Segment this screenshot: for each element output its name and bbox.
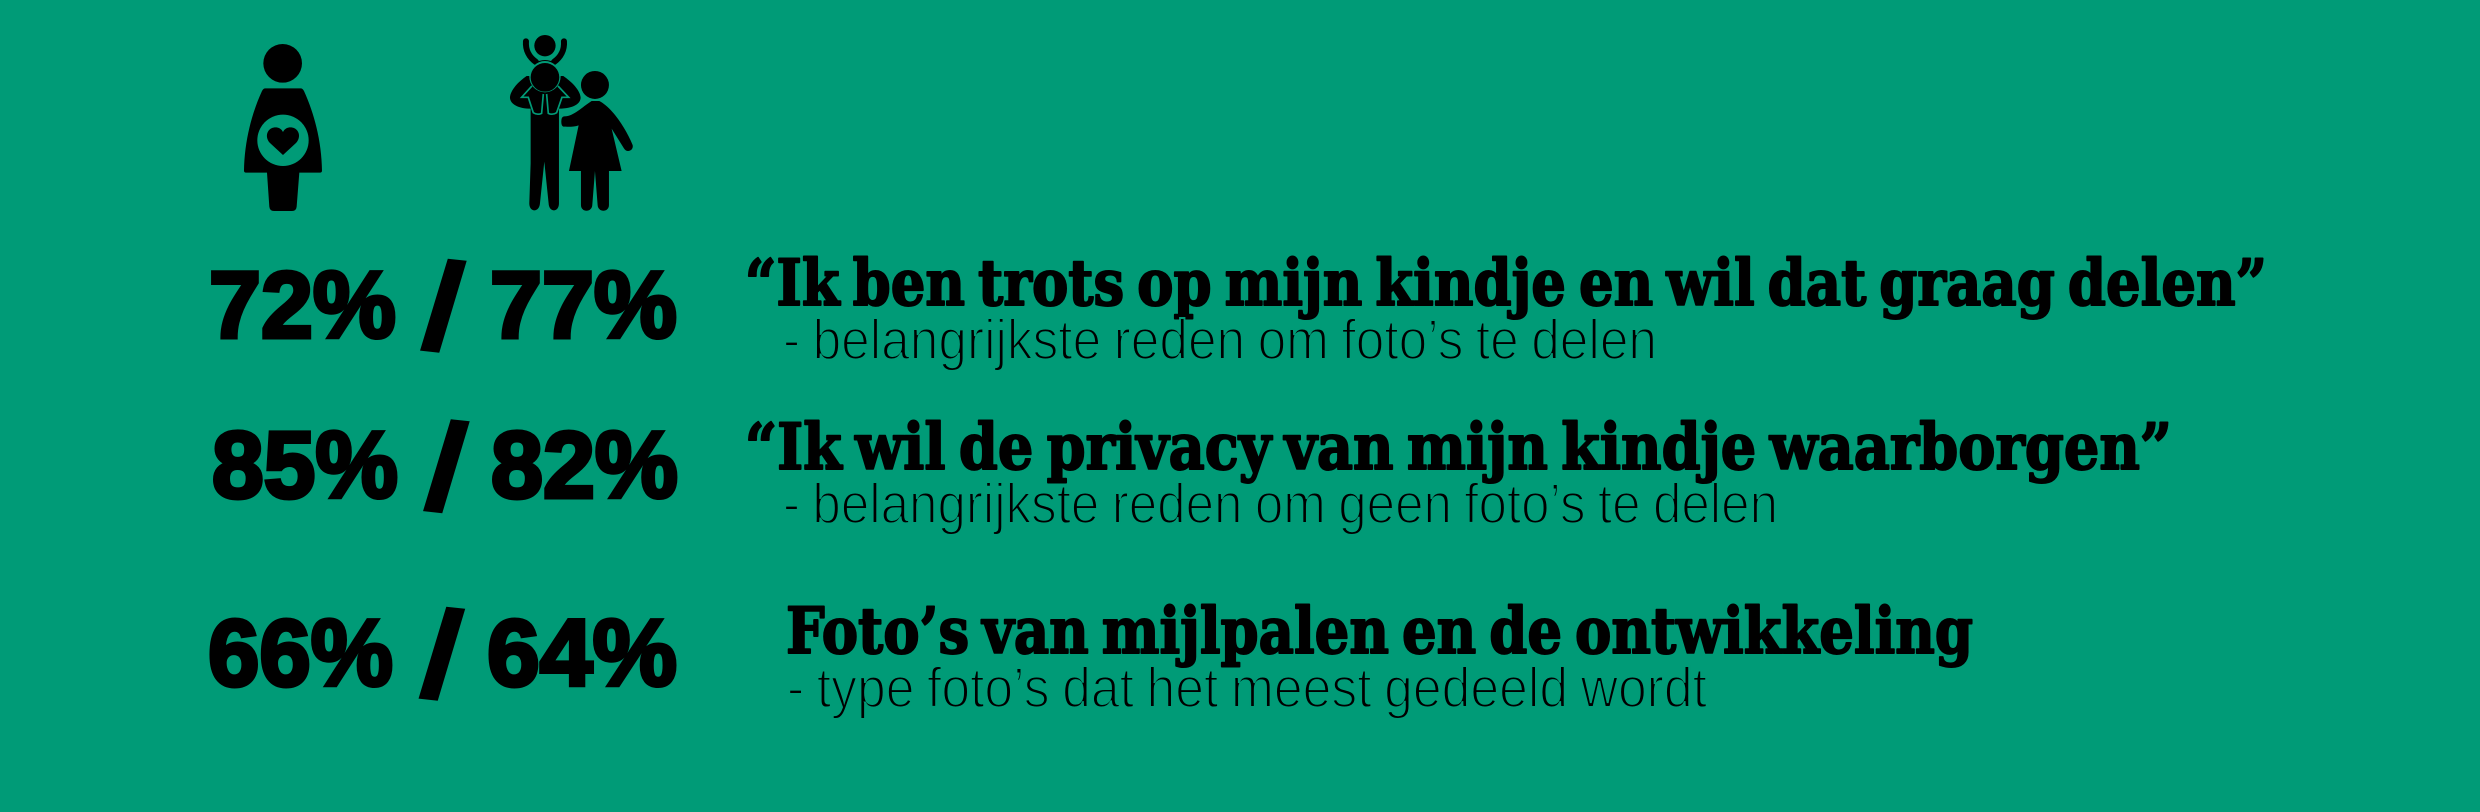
caption 2: - belangrijkste reden om geen foto’s te delen (783, 472, 1778, 536)
percentage 77%: 77% (490, 252, 677, 358)
slash: / (418, 587, 465, 723)
percentage 66%: 66% (208, 600, 393, 706)
row: trots (209, 239, 2267, 375)
slash: / (420, 239, 467, 375)
row: mijlpalen (208, 587, 1973, 723)
icon: father with child on shoulders and mother (510, 35, 633, 211)
heading: quote 1: “Ik ben trots op mijn kindje en wil dat graag delen” (745, 246, 2267, 321)
caption 1: - belangrijkste reden om foto’s te delen (783, 308, 1657, 372)
caption 3: - type foto’s dat het meest gedeeld wordt (787, 656, 1707, 720)
row: privacy (212, 399, 2172, 536)
icon: pregnant woman (244, 44, 322, 211)
percentage 72%: 72% (209, 252, 396, 358)
percentage 82%: 82% (491, 412, 678, 518)
percentage 64%: 64% (487, 600, 677, 706)
heading: quote 2: “Ik wil de privacy van mijn kindje waarborgen” (745, 410, 2172, 485)
slash: / (423, 399, 470, 536)
heading: photo type: Foto’s van mijlpalen en de ontwikkeling (786, 594, 1973, 669)
percentage 85%: 85% (212, 412, 398, 518)
